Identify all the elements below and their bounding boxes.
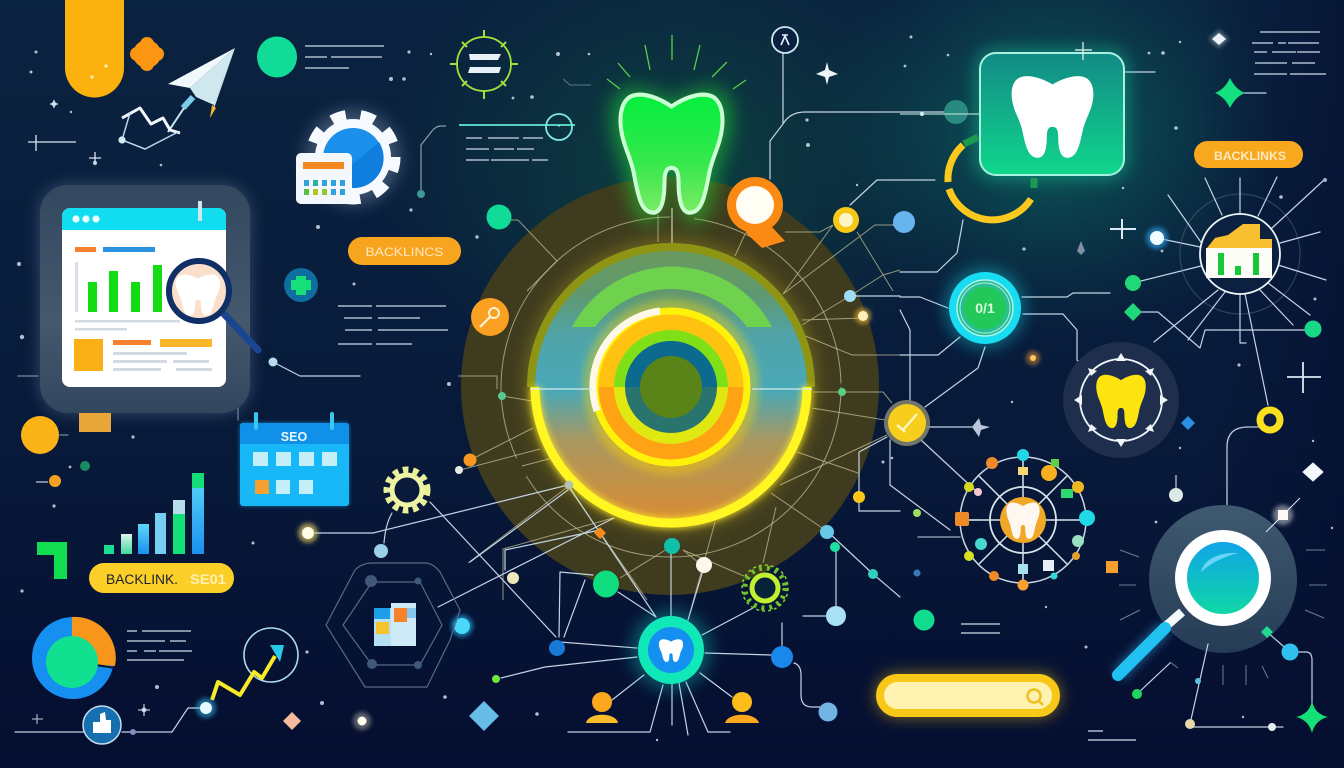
orange square bbox=[1106, 561, 1118, 573]
panel: report card bbox=[40, 185, 258, 413]
icon: orange location pin bbox=[727, 177, 785, 248]
calendar label: SEO bbox=[281, 430, 307, 444]
icon: white diamond bbox=[1303, 463, 1323, 481]
bar chart bbox=[104, 473, 204, 554]
dark halo disc behind target bbox=[461, 177, 879, 595]
icon: green corner bbox=[37, 542, 67, 579]
growth arrow in circle bbox=[196, 628, 298, 718]
left panel connector bbox=[273, 362, 360, 376]
wheel center tooth bbox=[1000, 497, 1046, 543]
card header bar bbox=[62, 201, 226, 230]
icon: white sparkle diamond bbox=[1209, 30, 1229, 48]
lines right bbox=[770, 30, 1313, 530]
lines over the disc bbox=[458, 208, 900, 620]
icon: progress badge bbox=[945, 268, 1025, 348]
node: green dot upper left of disc bbox=[486, 204, 512, 230]
text lines beside donut bbox=[127, 631, 192, 660]
wheel nodes bbox=[955, 449, 1095, 590]
badge: BACKLINKS: BACKLINKS bbox=[1214, 149, 1286, 163]
badge: BACKLINCS: BACKLINCS bbox=[366, 245, 444, 259]
orange blob and shapes lower left of panel bbox=[21, 413, 111, 487]
connector nodes near magnifier bbox=[1132, 475, 1312, 731]
target green arc bbox=[572, 267, 772, 327]
icon: person left bbox=[586, 692, 618, 723]
sparkle glow star bbox=[1266, 498, 1300, 532]
card: teal tooth bbox=[900, 42, 1129, 180]
icon: glowing green tooth bbox=[607, 35, 746, 224]
icon: pale yellow gear bbox=[387, 470, 427, 510]
nodes around central disc bbox=[130, 190, 1040, 735]
target crosshair bbox=[530, 388, 812, 390]
text lines beside badge bbox=[338, 306, 448, 344]
icon: plus badge bbox=[284, 268, 318, 302]
icon: yellow ring node bbox=[1227, 410, 1280, 505]
donut chart bbox=[32, 617, 116, 699]
icon: paper plane with rising line bbox=[118, 48, 235, 149]
icon: tooth hub at bottom bbox=[631, 610, 711, 690]
diamond: blue bbox=[1181, 416, 1195, 430]
green dot with text lines bbox=[257, 36, 384, 78]
icon: person right bbox=[725, 692, 759, 723]
badge: BACKLINK SE01: BACKLINK. bbox=[106, 572, 178, 587]
sparkle crosses bbox=[28, 100, 1321, 724]
diamond: peach bbox=[283, 712, 301, 730]
circuit line with text rows near center top bbox=[421, 79, 591, 190]
small right side nodes bbox=[1077, 178, 1327, 338]
icon: small circle with pin bbox=[772, 27, 798, 53]
icon: green ring with bars bbox=[450, 30, 518, 99]
magnifier on tooth bbox=[169, 261, 258, 350]
mini calendar bbox=[296, 153, 352, 204]
card bar chart bbox=[75, 247, 162, 312]
text lines top right bbox=[1252, 32, 1326, 74]
target outer ring bbox=[524, 238, 818, 532]
icon: orange key badge bbox=[471, 298, 509, 336]
hub: chart with spokes bbox=[1154, 177, 1326, 405]
short text lines bottom bbox=[961, 624, 1136, 740]
badge: BACKLINK SE01 bbox=[89, 563, 234, 593]
icon: gear with calendar bbox=[296, 109, 401, 205]
search icon bbox=[1028, 690, 1043, 705]
SEO calendar bbox=[240, 414, 349, 506]
badge: BACKLINK SE01: SE01 bbox=[190, 572, 227, 587]
central target bbox=[524, 238, 818, 532]
card text lines bbox=[74, 320, 212, 371]
icon: green diamond bbox=[1215, 78, 1245, 108]
calendar cells bbox=[253, 452, 337, 494]
sparkle grey diamond bbox=[972, 418, 990, 437]
badge: BACKLINKS bbox=[1194, 141, 1303, 168]
mini chart icon bbox=[374, 603, 416, 646]
arc: yellow progress ring bbox=[948, 137, 1034, 220]
hexagon network with chart bbox=[326, 563, 460, 687]
search bar bbox=[876, 674, 1060, 717]
bottom-left line bbox=[15, 708, 200, 732]
icon: orange top pill bbox=[65, 0, 124, 97]
icon: yellow tooth badge bbox=[1063, 342, 1179, 458]
icon: yellow node with check bbox=[884, 400, 930, 446]
icon: green four-point star bbox=[1296, 701, 1328, 733]
icon: large magnifier bbox=[1118, 505, 1327, 685]
icon: orange flower bbox=[130, 37, 164, 71]
badge: BACKLINCS bbox=[348, 237, 461, 265]
lines bottom bbox=[315, 485, 900, 735]
target inner rings bbox=[583, 299, 759, 475]
badge label: 0/1 bbox=[975, 300, 995, 316]
network wheel with tooth bbox=[955, 449, 1095, 590]
diamond: light blue bbox=[469, 701, 499, 731]
icon: thumbs up badge bbox=[83, 706, 121, 744]
icon: green gear bbox=[742, 565, 788, 611]
sparkle star near top bbox=[816, 62, 838, 85]
